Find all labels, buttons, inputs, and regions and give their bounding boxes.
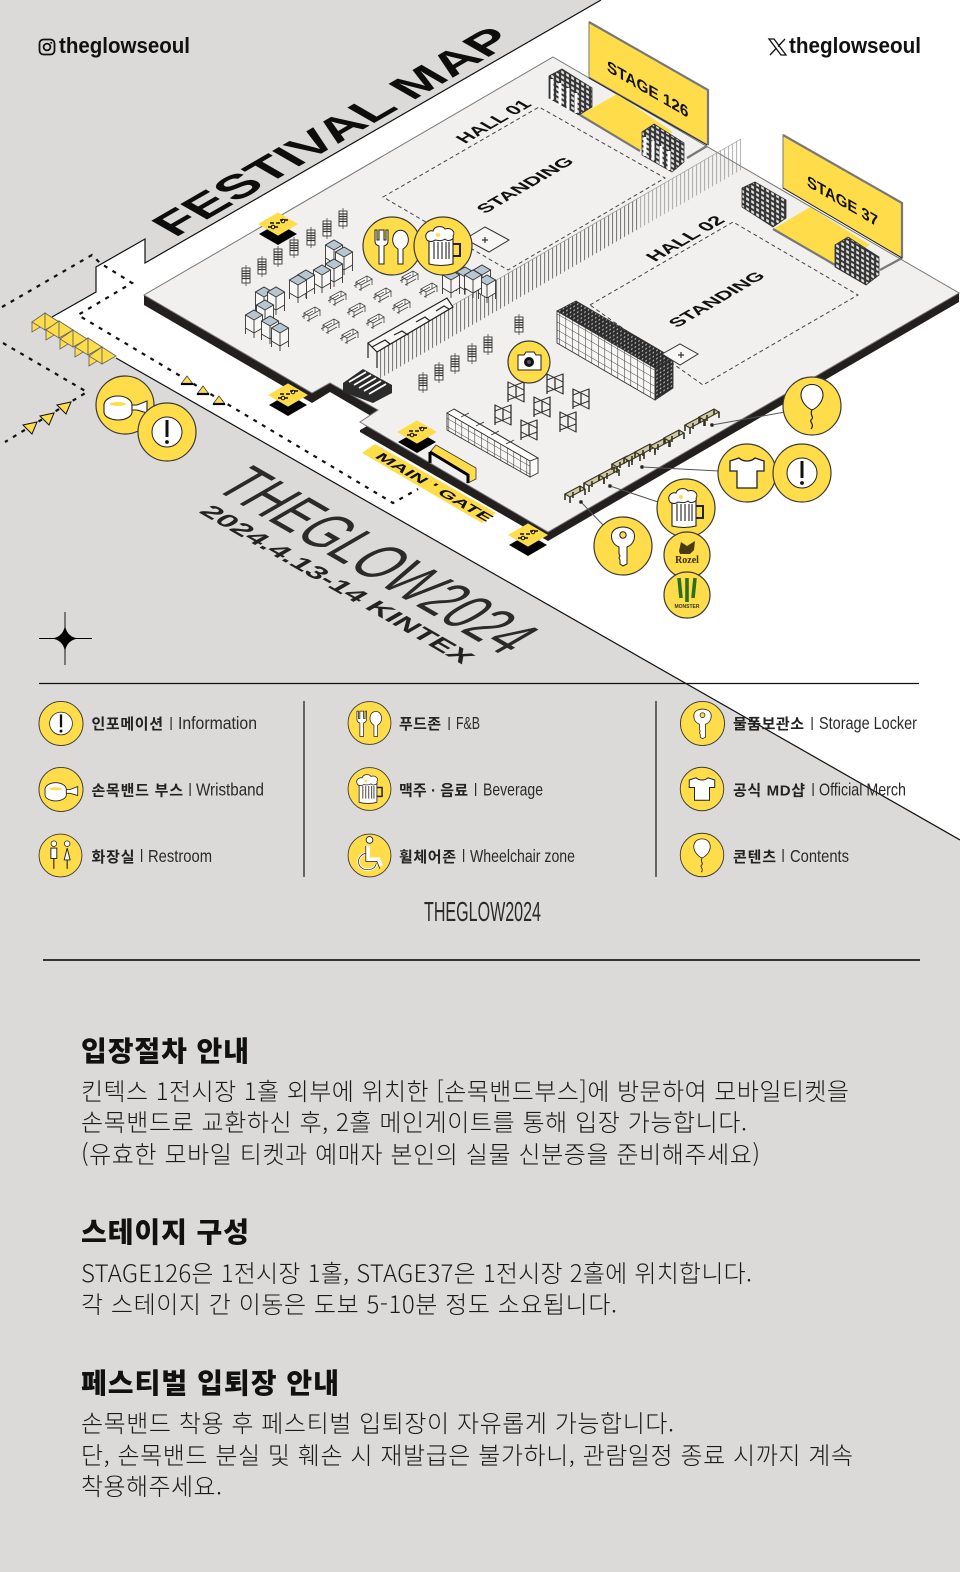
standing zone hall 01 <box>383 107 665 270</box>
long truss <box>447 409 538 477</box>
stage 126: STAGE 126 <box>607 58 688 122</box>
section: re-entry: 페스티벌 입퇴장 안내 <box>81 1362 339 1402</box>
legend bottom rule <box>43 959 920 961</box>
white venue ground <box>52 0 960 840</box>
legend <box>39 701 917 877</box>
section: entry procedure <box>81 1030 849 1170</box>
main gate label <box>362 444 498 524</box>
hall floor platform <box>144 57 959 541</box>
section: re-entry: 착용해주세요. <box>81 1467 222 1502</box>
logo: the glow 2024: THEGLOW2024 <box>199 457 556 664</box>
section: re-entry: 손목밴드 착용 후 페스티벌 입퇴장이 자유롭게 가능합니다. <box>81 1404 674 1439</box>
main gate structure <box>430 445 476 483</box>
legend: contents: Contents <box>790 846 849 866</box>
stage 37: STAGE 37 <box>807 173 878 231</box>
legend: information: 인포메이션 <box>92 716 163 733</box>
title: festival map: FESTIVAL MAP <box>139 20 526 243</box>
legend: beverage <box>348 768 543 810</box>
legend: merch: 공식 MD샵 <box>733 782 805 800</box>
icon: info <box>138 403 196 461</box>
seating cubes <box>246 240 496 351</box>
legend: food <box>348 702 480 744</box>
legend: restroom <box>39 834 212 877</box>
legend: food: 푸드존 <box>399 716 441 733</box>
main gate label: MAIN ' GATE <box>371 450 498 524</box>
section: entry procedure: 손목밴드로 교환하신 후, 2홀 메인게이트를 통해 입장 가능합니다. <box>81 1103 747 1138</box>
instagram handle: theglowseoul <box>59 33 190 58</box>
section: entry procedure: 킨텍스 1전시장 1홀 외부에 위치한 [손목밴드부스]에 방문하여 모바일티켓을 <box>81 1072 849 1107</box>
icon: official merch <box>718 444 776 502</box>
section: stage layout: 각 스테이지 간 이동은 도보 5-10분 정도 소요됩니다. <box>81 1285 617 1320</box>
section: stage layout: 스테이지 구성 <box>81 1211 249 1251</box>
legend: merch: Official Merch <box>819 780 906 800</box>
hall labels: STANDING <box>664 269 770 330</box>
legend: wristband: 손목밴드 부스 <box>92 782 183 800</box>
legend: contents: 콘텐츠 <box>733 849 776 866</box>
standing zone hall 02 <box>590 222 858 385</box>
speaker poles <box>242 208 523 393</box>
legend: information: Information <box>178 713 257 733</box>
legend: restroom: 화장실 <box>92 849 134 866</box>
icon: monster sponsor <box>664 572 710 618</box>
vendor booths <box>565 409 719 503</box>
stage 37 <box>773 135 902 270</box>
legend: beverage: Beverage <box>483 780 543 800</box>
wheelchair tiles <box>465 227 698 365</box>
legend: beverage: 맥주 · 음료 <box>399 782 468 800</box>
icon: beer stand <box>657 479 715 537</box>
hall divider fence <box>377 139 741 380</box>
x handle: theglowseoul <box>789 33 921 58</box>
legend: wristband <box>39 767 264 812</box>
legend: storage <box>680 701 917 746</box>
section: entry procedure: (유효한 모바일 티켓과 예매자 본인의 실물 신분증을 준비해주세요) <box>81 1135 760 1170</box>
legend: wheelchair: Wheelchair zone <box>470 846 575 866</box>
legend: wristband: Wristband <box>196 780 264 800</box>
icon: wristband booth <box>96 376 154 434</box>
section: stage layout <box>81 1211 752 1320</box>
restroom tiles <box>259 213 547 556</box>
entrance gates (yellow) <box>32 313 116 366</box>
legend: wheelchair <box>348 834 575 877</box>
icon: camera <box>508 341 550 383</box>
icon: food zone <box>363 217 421 275</box>
legend: storage: 물품보관소 <box>733 716 804 733</box>
legend: merch <box>680 767 906 811</box>
section: re-entry: 단, 손목밴드 분실 및 훼손 시 재발급은 불가하니, 관람일정 종료 시까지 계속 <box>81 1436 853 1471</box>
icon: rozel sponsor: Rozel <box>675 555 699 566</box>
connector lines <box>580 412 785 525</box>
icon: monster sponsor: MONSTER <box>674 604 700 610</box>
stage 126 <box>580 22 708 158</box>
event date: 2024.4.13-14 KINTEX <box>193 501 480 668</box>
hall labels: HALL 02 <box>641 213 729 264</box>
hall labels: STANDING <box>472 154 579 216</box>
speaker stacks <box>549 69 879 285</box>
sparkle star <box>39 612 92 665</box>
info kiosks <box>495 374 589 440</box>
hall labels <box>451 97 770 330</box>
section: stage layout: STAGE126은 1전시장 1홀, STAGE37은 1전시장 2홀에 위치합니다. <box>81 1254 752 1289</box>
hall labels: HALL 01 <box>451 97 536 146</box>
icon: info 2 <box>773 444 831 502</box>
queue routes (dotted) <box>2 255 418 503</box>
icon: contents balloon <box>783 377 841 435</box>
legend: restroom: Restroom <box>148 846 212 866</box>
icon: storage locker <box>594 517 652 575</box>
stairs <box>343 369 392 403</box>
fence top truss <box>368 298 453 368</box>
legend: contents <box>680 833 849 877</box>
legend: wheelchair: 휠체어존 <box>399 849 456 866</box>
legend: information <box>39 701 257 746</box>
section: entry procedure: 입장절차 안내 <box>81 1030 249 1070</box>
icon: beverage <box>414 217 472 275</box>
legend: food: F&B <box>456 713 480 733</box>
icon: rozel sponsor <box>664 532 710 578</box>
direction arrows <box>23 366 390 434</box>
big truss hall 02 <box>557 301 673 400</box>
small logo: THEGLOW2024 <box>424 896 541 927</box>
lounge tables <box>302 271 437 344</box>
section: re-entry <box>81 1362 853 1502</box>
legend top rule <box>39 682 919 684</box>
legend: storage: Storage Locker <box>819 713 917 733</box>
